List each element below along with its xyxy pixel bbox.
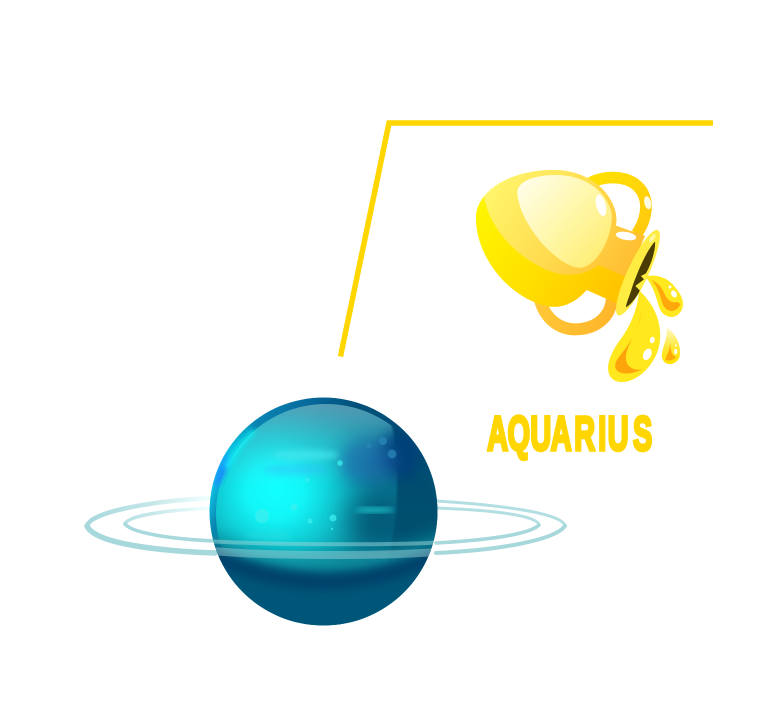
bubbles xyxy=(255,460,343,530)
top sheen xyxy=(230,404,394,472)
water drop: small xyxy=(662,328,680,364)
cyan cloud bands xyxy=(271,450,339,460)
label: AQUARIUS: AQUARIUS xyxy=(487,408,652,461)
handle highlight xyxy=(643,195,652,210)
bright crescent glint xyxy=(226,430,254,468)
glints xyxy=(594,193,637,242)
jug top handle xyxy=(591,178,646,234)
dark right shade xyxy=(391,424,438,602)
water drop: right xyxy=(645,276,683,317)
icon: Aquarius water jug xyxy=(476,170,683,382)
planet body xyxy=(216,404,398,570)
jug highlight xyxy=(517,175,612,268)
planet xyxy=(210,398,438,626)
planet rings, back xyxy=(87,498,565,553)
bottom shading xyxy=(210,527,436,626)
jug upper shading xyxy=(484,170,645,277)
left blue glint xyxy=(212,452,231,488)
jug bottom handle xyxy=(540,298,612,329)
jug mouth opening xyxy=(626,242,655,307)
pointer line xyxy=(340,123,713,356)
rim glint xyxy=(648,233,657,244)
water drop: large xyxy=(608,291,660,382)
jug mouth rim xyxy=(609,226,667,320)
front rings on planet xyxy=(205,541,445,544)
jug body xyxy=(476,170,645,307)
